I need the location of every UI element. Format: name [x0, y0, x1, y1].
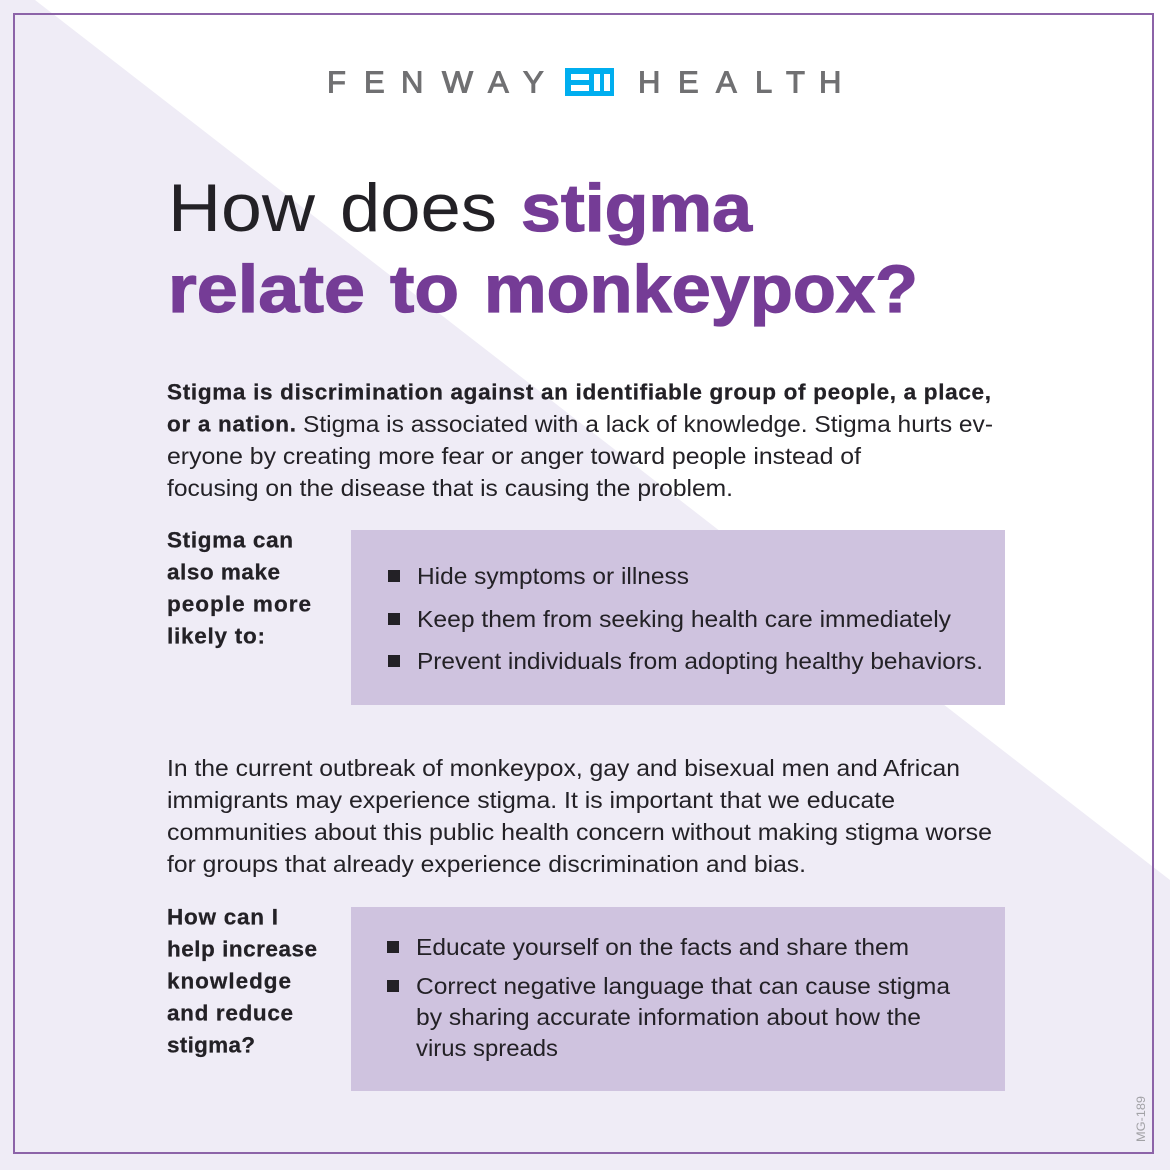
sidebar heading: stigma can also: also make: [167, 560, 280, 584]
title: stigma: [521, 171, 753, 246]
logo: Fenway Health: A: [716, 64, 737, 100]
panel: how to help: Educate yourself on the facts and share them: [416, 934, 909, 960]
icon: logo mark: [565, 68, 614, 96]
intro paragraph: [167, 380, 993, 501]
sidebar heading: stigma can also: likely to:: [167, 624, 265, 648]
logo: Fenway Health: E: [678, 64, 699, 100]
intro paragraph: Stigma is discrimination against an identifiable group of people, a place,: [167, 380, 991, 404]
panel: how to help: virus spreads: [416, 1035, 558, 1061]
sidebar heading: how can I help: and reduce: [167, 1000, 293, 1026]
panel: effects of stigma: Hide symptoms or illness: [417, 563, 689, 589]
logo: Fenway Health: N: [401, 64, 423, 100]
sidebar heading: how can I help: stigma?: [167, 1032, 255, 1058]
sidebar heading: stigma can also: Stigma can: [167, 528, 293, 552]
title: to: [390, 252, 459, 327]
logo: Fenway Health: A: [488, 64, 509, 100]
title: monkeypox?: [484, 252, 918, 327]
outbreak paragraph: [167, 755, 992, 877]
logo: Fenway Health: [327, 64, 841, 100]
sidebar heading: stigma can also: people more: [167, 592, 311, 616]
outbreak paragraph: In the current outbreak of monkeypox, gay and bisexual men and African: [167, 755, 960, 781]
intro paragraph: or a nation.: [167, 412, 296, 436]
logo: Fenway Health: F: [327, 64, 346, 100]
outbreak paragraph: immigrants may experience stigma. It is important that we educate: [167, 787, 895, 813]
sidebar heading: how can I help: help increase: [167, 936, 317, 962]
intro paragraph: eryone by creating more fear or anger toward people instead of: [167, 443, 862, 469]
intro paragraph: Stigma is associated with a lack of knowledge. Stigma hurts ev-: [303, 411, 993, 437]
sidebar heading: how can I help: [167, 904, 317, 1058]
panel: how to help: Correct negative language that can cause stigma: [416, 973, 950, 999]
panel: how to help: by sharing accurate information about how the: [416, 1004, 921, 1030]
title: relate: [168, 252, 365, 327]
document code: MG-189: [1134, 1096, 1148, 1142]
outbreak paragraph: communities about this public health concern without making stigma worse: [167, 819, 992, 845]
logo: Fenway Health: W: [442, 64, 474, 100]
logo: Fenway Health: E: [364, 64, 385, 100]
sidebar heading: how can I help: How can I: [167, 904, 278, 930]
title: How: [168, 170, 316, 246]
panel: effects of stigma: [351, 530, 1005, 705]
panel: effects of stigma: Keep them from seeking health care immediately: [417, 606, 952, 632]
title: [168, 170, 918, 327]
logo: Fenway Health: H: [638, 64, 660, 100]
panel: effects of stigma: Prevent individuals from adopting healthy behaviors.: [417, 648, 983, 674]
logo: Fenway Health: Y: [523, 64, 544, 100]
logo: Fenway Health: T: [786, 64, 805, 100]
sidebar heading: stigma can also: [167, 528, 311, 648]
logo: Fenway Health: H: [819, 64, 841, 100]
outbreak paragraph: for groups that already experience discrimination and bias.: [167, 851, 806, 877]
title: does: [340, 170, 497, 246]
logo: Fenway Health: L: [755, 64, 772, 100]
intro paragraph: focusing on the disease that is causing the problem.: [167, 475, 733, 501]
sidebar heading: how can I help: knowledge: [167, 968, 291, 994]
panel: how to help: [351, 907, 1005, 1091]
